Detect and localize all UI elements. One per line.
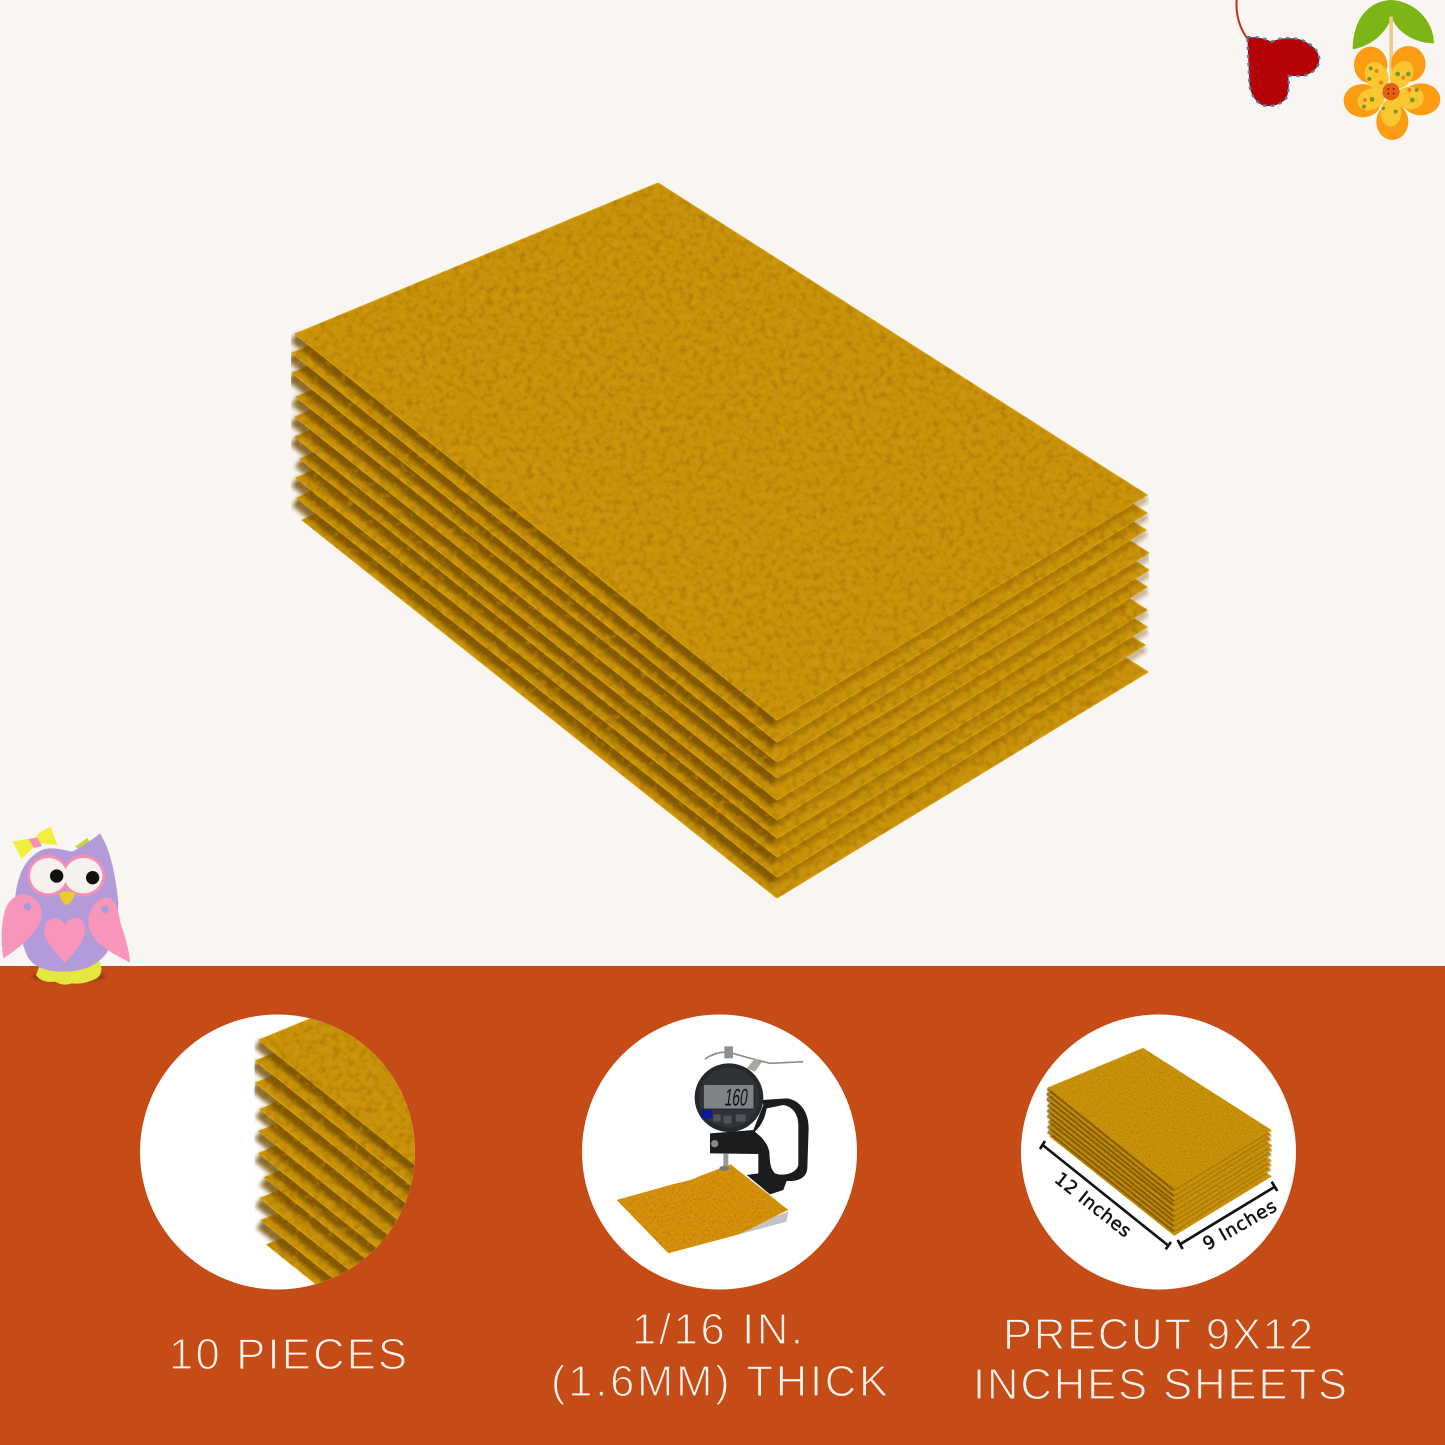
main felt sheet stack <box>291 183 1149 898</box>
dimension: 9 inches: 9 Inches <box>1199 1196 1281 1255</box>
dimension: 12 inches: 12 Inches <box>1050 1168 1135 1242</box>
label: thickness in mm: (1.6MM) THICK <box>551 1358 888 1406</box>
bottom orange band <box>0 966 1445 1445</box>
panel: thickness <box>551 1014 888 1406</box>
circle with stack edge close-up <box>140 1014 415 1290</box>
label: inches sheets: INCHES SHEETS <box>973 1361 1347 1409</box>
circle with small stack <box>1021 1014 1296 1290</box>
icon: thickness gauge measuring felt: 160 <box>723 1085 750 1112</box>
dimension: 12 inches <box>1040 1141 1171 1249</box>
icon: thickness gauge measuring felt <box>617 1046 809 1253</box>
circle background <box>582 1014 857 1290</box>
icon: felt heart ornament <box>1237 0 1319 106</box>
panel: size <box>973 1014 1347 1409</box>
icon: felt owl <box>2 827 130 985</box>
label: 10 pieces: 10 PIECES <box>169 1331 407 1379</box>
panel: 10 pieces <box>140 1014 415 1369</box>
label: precut size: PRECUT 9X12 <box>1003 1311 1313 1359</box>
icon: felt flower with leaves <box>1344 0 1440 140</box>
label: thickness: 1/16 IN. <box>632 1306 803 1354</box>
dimension: 9 inches <box>1178 1182 1281 1255</box>
